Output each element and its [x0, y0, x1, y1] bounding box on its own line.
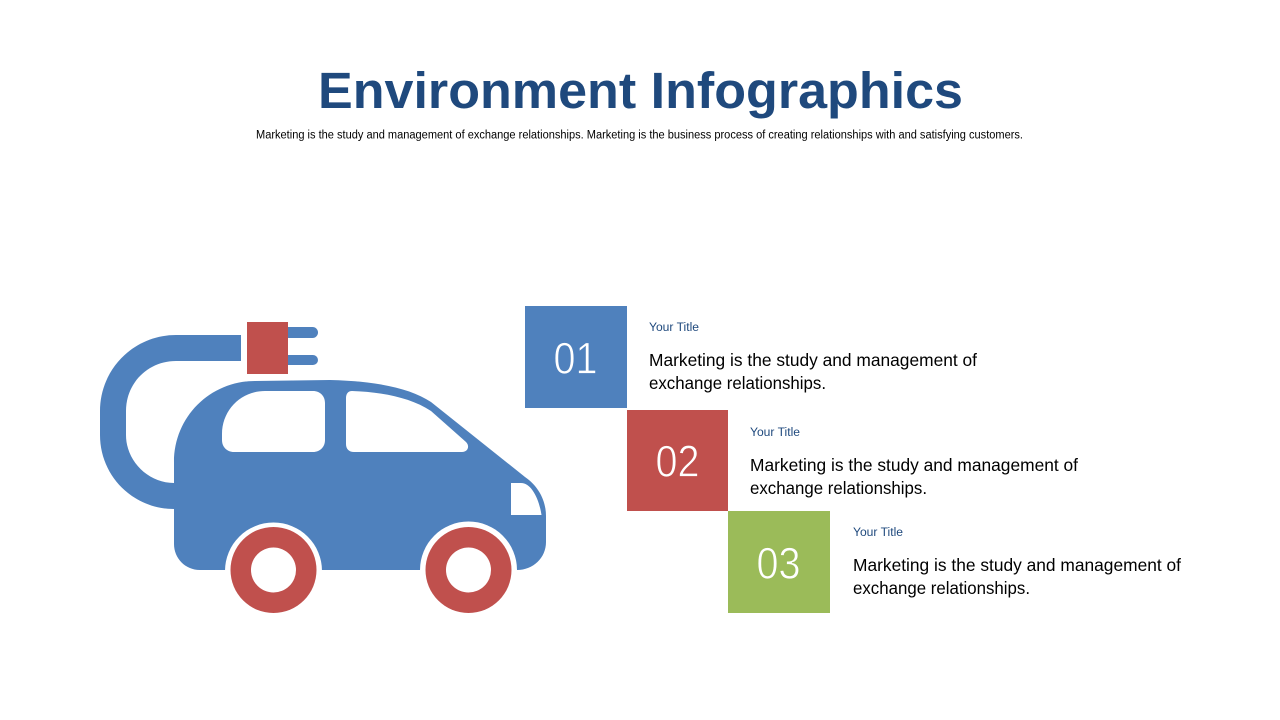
step 02 text: exchange relationships. [750, 478, 927, 498]
step 03 text: Marketing is the study and management of [853, 555, 1181, 575]
step 03 title: Your Title [853, 527, 903, 539]
step 01 title: Your Title [649, 322, 699, 334]
step 02 title: Your Title [750, 427, 800, 439]
step 02 text: Marketing is the study and management of [750, 455, 1078, 475]
icon: electric car [100, 322, 546, 625]
step 01 [525, 306, 977, 408]
car body [174, 380, 546, 570]
number box 01: 01 [554, 334, 598, 384]
step 01 text: exchange relationships. [649, 373, 826, 393]
number box 02: 02 [656, 438, 700, 486]
step 01 text: Marketing is the study and management of [649, 350, 977, 370]
number box 03: 03 [756, 540, 800, 588]
number box 01 [525, 306, 627, 408]
number box 02 [627, 410, 728, 511]
number box 03 [728, 511, 830, 613]
charging cord [100, 335, 241, 509]
step 03 text: exchange relationships. [853, 578, 1030, 598]
step 02 [627, 410, 1078, 511]
plug body [247, 322, 288, 374]
step 03 [728, 511, 1181, 613]
subtitle: Marketing is the study and management of exchange relationships. Marketing is the business process of creating relationships with and satisfying customers. [256, 130, 1023, 142]
title: Environment Infographics [318, 62, 963, 119]
plug prongs [288, 327, 318, 365]
rear wheel [220, 522, 327, 625]
front wheel [415, 522, 522, 625]
